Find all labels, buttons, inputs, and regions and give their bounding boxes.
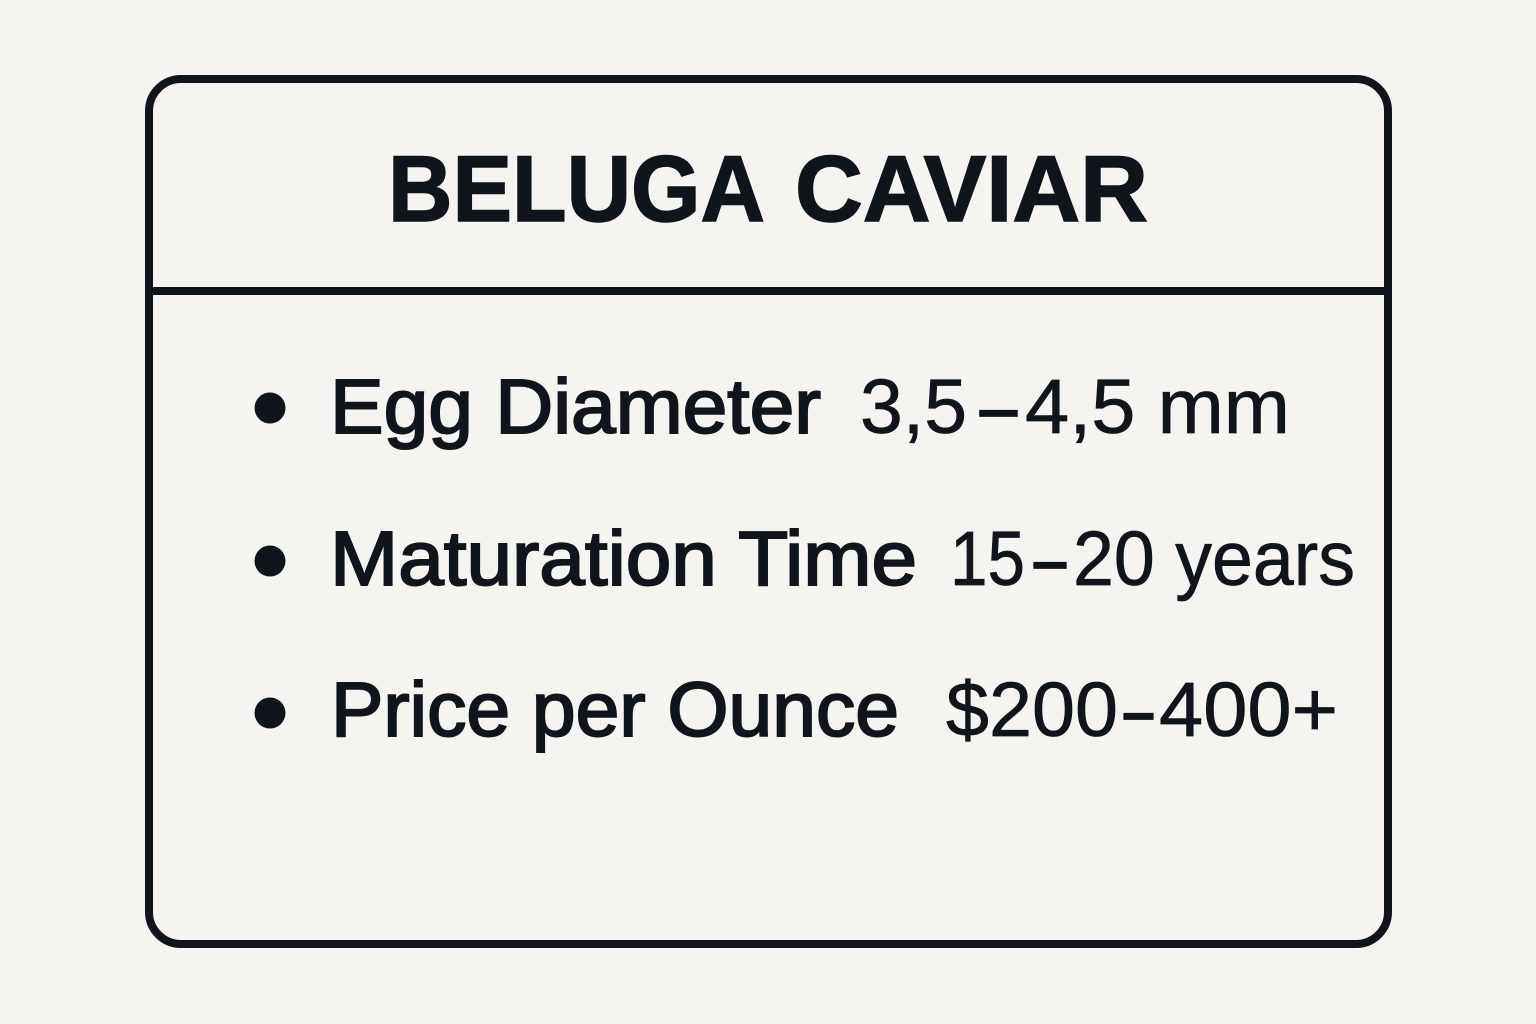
value: price per ounce: 400+ bbox=[1159, 667, 1338, 753]
value: egg diameter: – bbox=[980, 364, 1017, 450]
bullet bbox=[254, 698, 286, 728]
row: egg diameter bbox=[254, 364, 1290, 450]
value: price per ounce: – bbox=[1124, 667, 1153, 753]
value: maturation time: 20 years bbox=[1073, 516, 1355, 602]
value: egg diameter: 3,5 bbox=[860, 364, 967, 450]
value: egg diameter bbox=[860, 364, 1290, 450]
label: maturation time: Maturation Time bbox=[330, 516, 917, 602]
title bbox=[388, 136, 1148, 241]
header divider bbox=[148, 287, 1388, 295]
bullet bbox=[254, 546, 286, 576]
value: maturation time: – bbox=[1034, 516, 1066, 602]
title: BELUGA bbox=[388, 136, 765, 241]
title: CAVIAR bbox=[795, 136, 1148, 241]
panel: beluga caviar card bbox=[145, 75, 1392, 948]
value: price per ounce: $200 bbox=[946, 667, 1118, 753]
value: egg diameter: 4,5 mm bbox=[1025, 364, 1290, 450]
value: maturation time: 15 bbox=[950, 516, 1025, 602]
value: maturation time bbox=[950, 516, 1355, 602]
row: maturation time bbox=[254, 516, 1355, 602]
value: price per ounce bbox=[946, 667, 1338, 753]
row: price per ounce bbox=[254, 667, 1338, 753]
bullet bbox=[254, 392, 286, 424]
label: price per ounce: Price per Ounce bbox=[331, 667, 899, 753]
label: egg diameter: Egg Diameter bbox=[330, 364, 821, 450]
